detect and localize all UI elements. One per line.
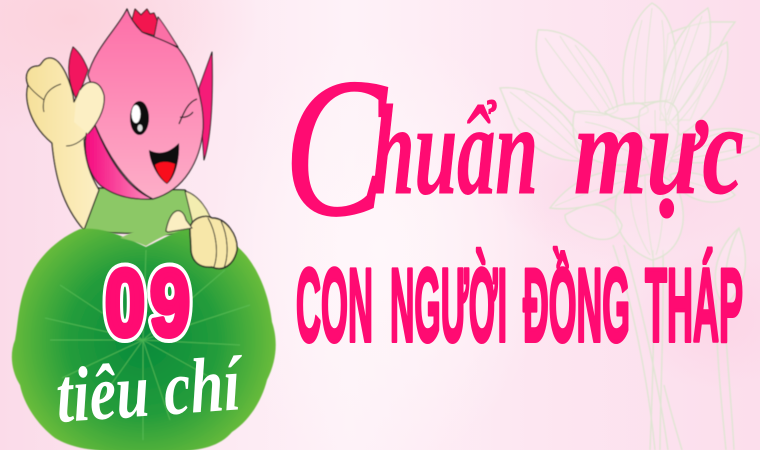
number badge: 09: 9: [150, 250, 190, 355]
hand front finger: [74, 82, 104, 134]
right shoulder: [185, 191, 213, 232]
hand fingers: [28, 84, 92, 146]
mascot: lotus bud character: [26, 9, 213, 235]
right back petal: [199, 52, 212, 160]
side bud: [715, 228, 745, 305]
stems: [613, 245, 734, 450]
back petals: [660, 22, 735, 120]
label: tiêu chí: tiêu chí: [53, 339, 247, 439]
eye: [130, 101, 149, 135]
head side petal: [85, 118, 153, 199]
left back petal: [69, 47, 88, 100]
head: [88, 9, 203, 199]
title: Chuẩn mực: [284, 38, 744, 257]
top pink petal: [154, 17, 178, 47]
title: Chuẩn mực: huẩn: [372, 79, 538, 221]
leaf veins: [45, 250, 250, 440]
title: Chuẩn mực: C: [284, 38, 387, 257]
subtitle: CON NGƯỜI ĐỒNG THÁP: NGƯỜI: [390, 248, 507, 364]
leaf notch: [120, 226, 175, 246]
number badge: 09: 9: [150, 250, 190, 355]
mouth: [149, 143, 179, 184]
winking eye: [179, 99, 197, 124]
front petals: [573, 111, 655, 165]
raised arm and hand: [26, 58, 104, 230]
number badge: 09: 0: [105, 250, 145, 355]
hand gripping leaf: [166, 211, 237, 268]
top red petals: [132, 9, 158, 36]
lotus line art watermark: [500, 3, 760, 450]
body: [83, 188, 197, 235]
veins: [510, 8, 755, 258]
lotus leaf: [12, 226, 276, 450]
number badge: 09: 0: [105, 250, 145, 355]
number badge: 09: [105, 250, 190, 355]
tongue: [155, 162, 175, 183]
subtitle: CON NGƯỜI ĐỒNG THÁP: CON: [296, 248, 373, 364]
